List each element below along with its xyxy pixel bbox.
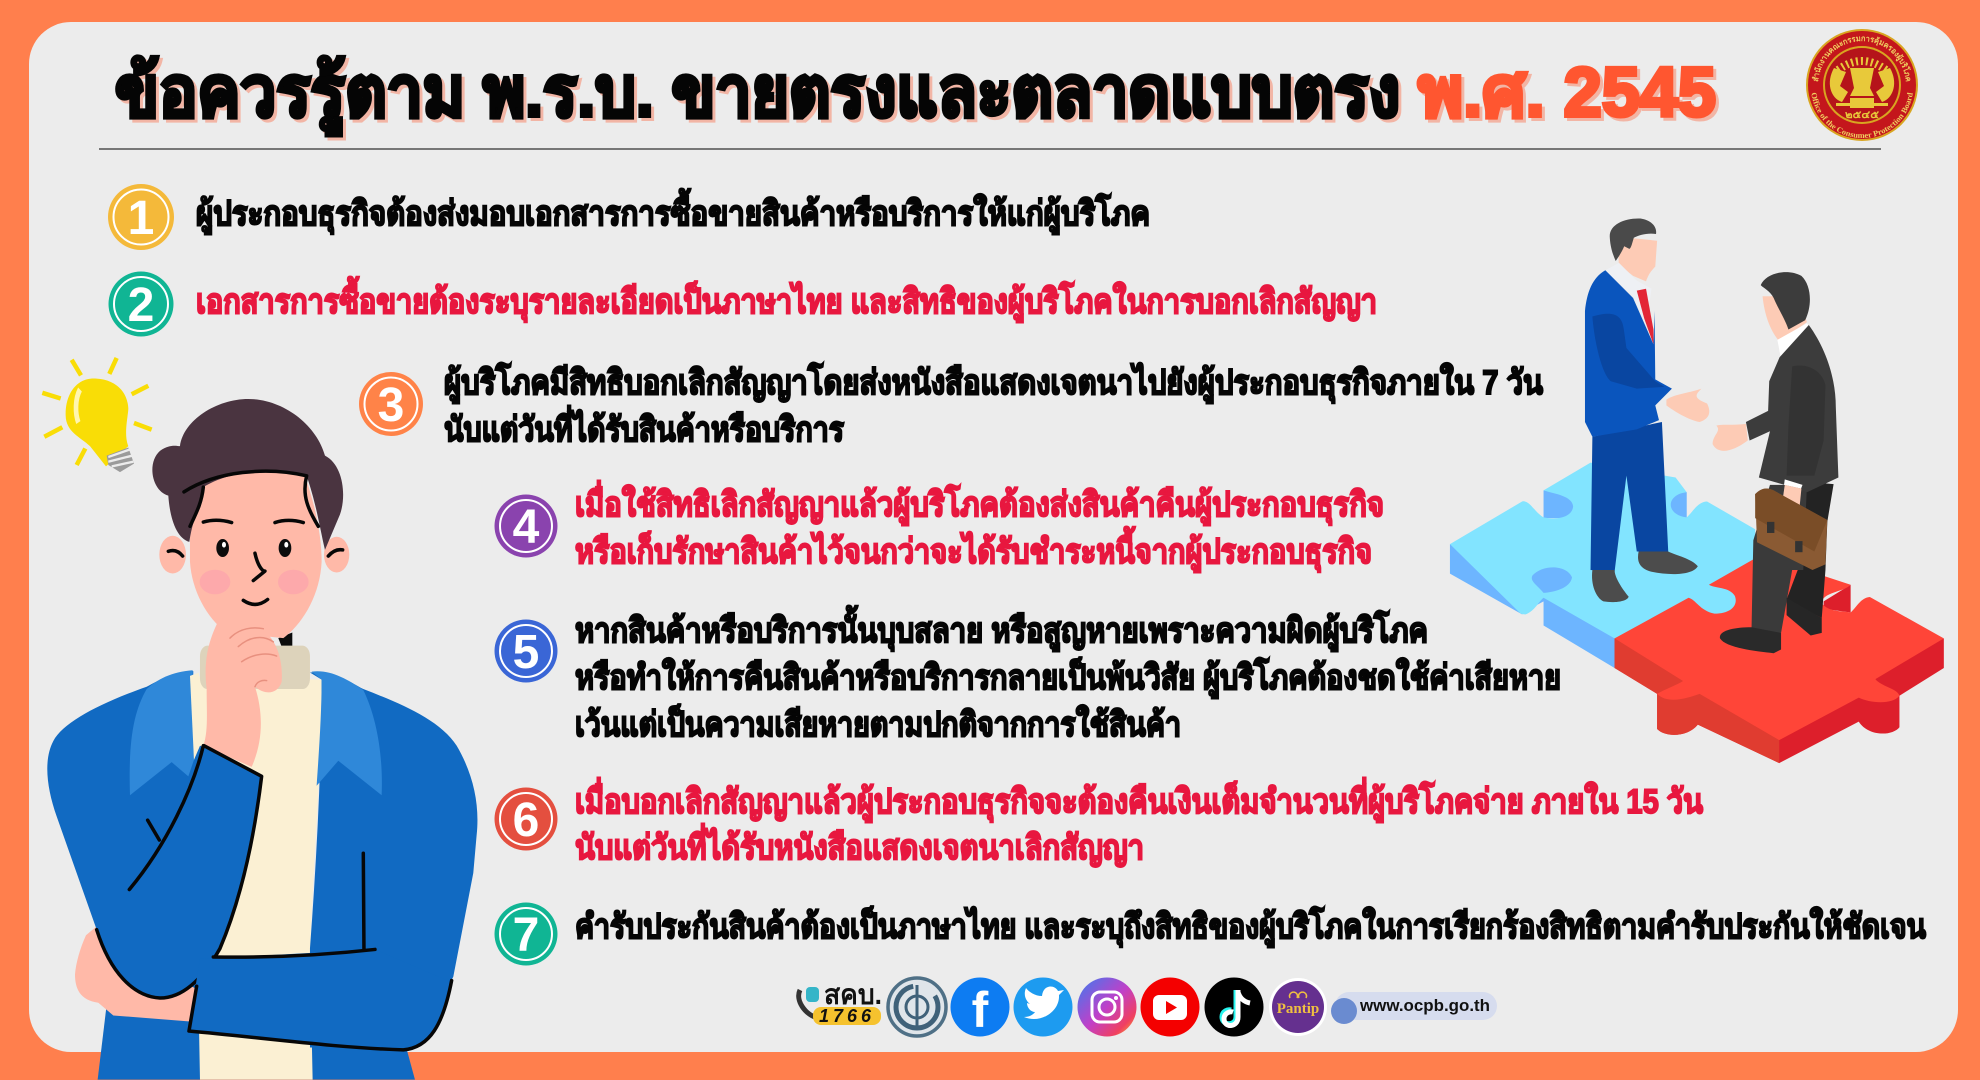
number badge 7: 7 bbox=[513, 909, 539, 962]
number badge 4 bbox=[494, 494, 558, 558]
number badge 5 bbox=[494, 620, 558, 682]
item 1 text: ผู้ประกอบธุรกิจต้องส่งมอบเอกสารการซื้อขายสินค้าหรือบริการให้แก่ผู้บริโภค bbox=[196, 188, 1150, 235]
icon: Instagram bbox=[1078, 978, 1136, 1036]
website link bbox=[1331, 992, 1497, 1024]
item 4 text: เมื่อใช้สิทธิเลิกสัญญาแล้วผู้บริโภคต้องส่งสินค้าคืนผู้ประกอบธุรกิจ bbox=[575, 480, 1384, 526]
item 5 text: เว้นแต่เป็นความเสียหายตามปกติจากการใช้สินค้า bbox=[575, 703, 1181, 744]
icon: hotline 1766: 1766 bbox=[819, 1006, 875, 1026]
number badge 2: 2 bbox=[128, 279, 154, 332]
item 4 text: หรือเก็บรักษาสินค้าไว้จนกว่าจะได้รับชำระหนี้จากผู้ประกอบธุรกิจ bbox=[575, 526, 1372, 573]
item 6 text: เมื่อบอกเลิกสัญญาแล้วผู้ประกอบธุรกิจจะต้องคืนเงินเต็มจำนวนที่ผู้บริโภคจ่าย ภายใน 15 วัน bbox=[575, 777, 1703, 823]
number badge 4: 4 bbox=[513, 501, 540, 554]
item 3 text: นับแต่วันที่ได้รับสินค้าหรือบริการ bbox=[444, 405, 845, 449]
red puzzle piece bbox=[1615, 555, 1944, 763]
number badge 7 bbox=[494, 902, 558, 966]
illustration: thinking man bbox=[47, 399, 477, 1080]
item 6 text: นับแต่วันที่ได้รับหนังสือแสดงเจตนาเลิกสัญญา bbox=[575, 823, 1144, 868]
item 4 text bbox=[575, 480, 1384, 573]
icon: hotline 1766: สคบ. bbox=[824, 979, 882, 1010]
item 3 text: ผู้บริโภคมีสิทธิบอกเลิกสัญญาโดยส่งหนังสือแสดงเจตนาไปยังผู้ประกอบธุรกิจภายใน 7 วัน bbox=[444, 362, 1543, 404]
item 6 text bbox=[575, 777, 1703, 868]
icon: Pantip bbox=[1269, 978, 1327, 1036]
number badge 6: 6 bbox=[513, 794, 539, 847]
icon: TikTok bbox=[1204, 978, 1264, 1036]
icon: consumer protection board seal: สำนักงานคณะกรรมการคุ้มครองผู้บริโภค bbox=[1812, 36, 1911, 82]
title: ข้อควรรู้ตาม พ.ร.บ. ขายตรงและตลาดแบบตรง bbox=[115, 53, 1400, 136]
illustration: businessmen handshake on puzzle pieces bbox=[1450, 218, 1944, 763]
item 5 text: หากสินค้าหรือบริการนั้นบุบสลาย หรือสูญหายเพราะความผิดผู้บริโภค bbox=[575, 605, 1428, 652]
icon: hotline 1766 bbox=[799, 979, 882, 1026]
number badge 2 bbox=[108, 272, 174, 336]
number badge 1 bbox=[108, 184, 174, 250]
icon: Twitter bbox=[1014, 978, 1072, 1036]
icon: consumer protection board seal: Office of the Consumer Protection Board bbox=[1812, 92, 1913, 138]
icon: YouTube bbox=[1140, 978, 1200, 1036]
number badge 6 bbox=[494, 788, 558, 850]
number badge 3 bbox=[359, 372, 423, 436]
icon: consumer protection board seal: ๒๕๔๕ bbox=[1845, 110, 1880, 121]
item 5 text: หรือทำให้การคืนสินค้าหรือบริการกลายเป็นพ้นวิสัย ผู้บริโภคต้องชดใช้ค่าเสียหาย bbox=[575, 656, 1561, 699]
businessman in blue suit bbox=[1585, 218, 1709, 602]
blue puzzle piece bbox=[1450, 463, 1755, 668]
number badge 5: 5 bbox=[513, 626, 539, 679]
businessman in black suit with briefcase bbox=[1713, 272, 1838, 653]
icon: light bulb bbox=[42, 358, 152, 472]
title: พ.ศ. 2545 bbox=[1418, 53, 1716, 131]
item 5 text bbox=[575, 605, 1561, 744]
number badge 3: 3 bbox=[378, 379, 404, 432]
icon: consumer protection board seal bbox=[1806, 29, 1918, 141]
icon: OCPB logo bbox=[888, 978, 946, 1036]
item 2 text: เอกสารการซื้อขายต้องระบุรายละเอียดเป็นภาษาไทย และสิทธิของผู้บริโภคในการบอกเลิกสัญญา bbox=[196, 276, 1377, 323]
number badge 1: 1 bbox=[128, 192, 154, 245]
icon: Facebook bbox=[950, 978, 1010, 1038]
icon: Facebook: f bbox=[972, 982, 989, 1038]
icon: Pantip: Pantip bbox=[1277, 1001, 1319, 1017]
item 3 text bbox=[444, 362, 1543, 449]
website link: www.ocpb.go.th bbox=[1359, 996, 1490, 1015]
